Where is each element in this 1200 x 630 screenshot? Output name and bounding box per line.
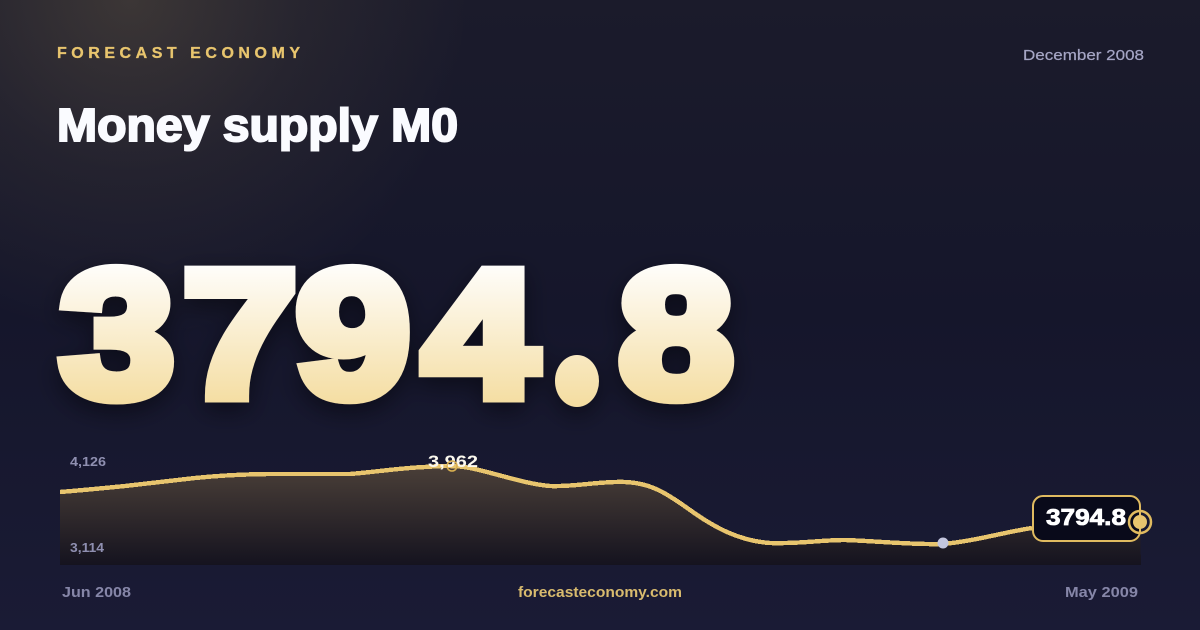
max marker [447,461,457,471]
big value: 3794.8 [60,233,733,434]
axis max: 4,126 [70,454,106,469]
axis min: 3,114 [70,540,105,555]
date: December 2008 [1023,47,1144,64]
current value callout [1033,496,1140,541]
title: Money supply M0 [57,99,458,151]
min marker [938,538,948,548]
site url: forecasteconomy.com [518,584,682,601]
start date: Jun 2008 [62,584,131,601]
end date: May 2009 [1065,584,1138,601]
line [60,466,1032,544]
brand eyebrow: FORECAST ECONOMY [57,45,300,62]
area under line [60,466,1141,565]
current value callout: 3794.8 [1046,504,1126,530]
chart [60,452,1151,565]
max label: 3,962 [428,452,478,471]
current marker [1129,511,1151,533]
